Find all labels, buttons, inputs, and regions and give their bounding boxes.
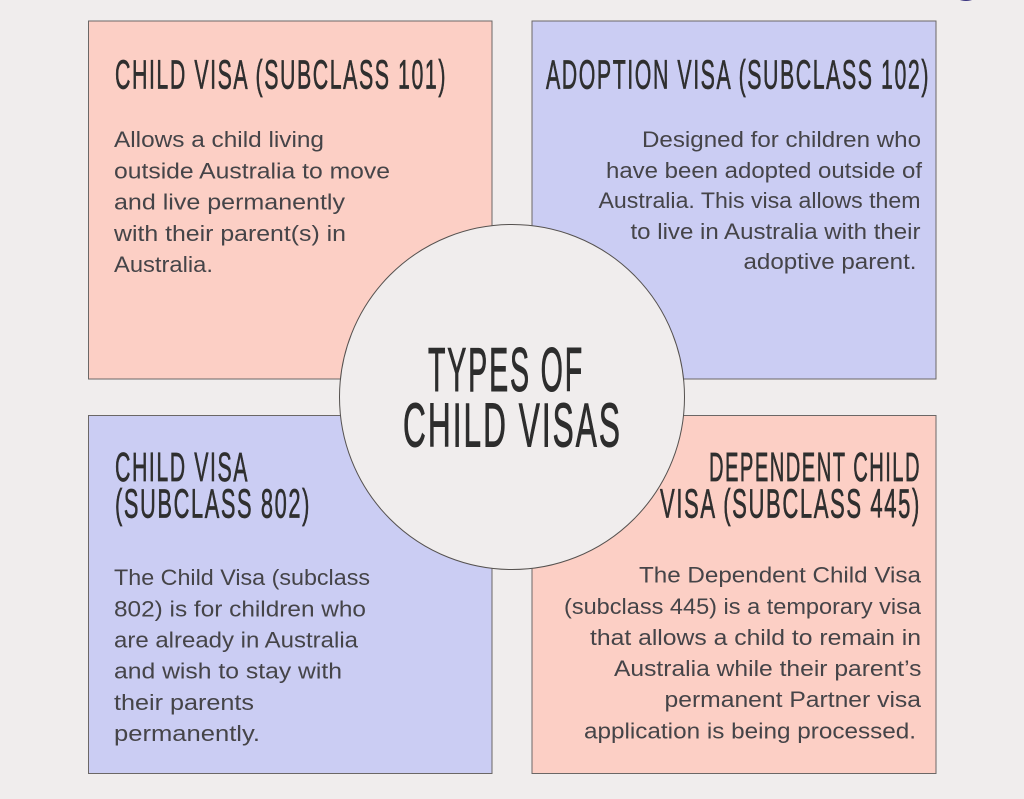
body text: and wish to stay with [114,658,342,684]
body text: outside Australia to move [114,158,390,184]
body text: application is being processed. [584,718,916,744]
top edge dark circle fragment [955,0,977,1]
panel: Adoption Visa subclass 102 [532,21,936,379]
body text: their parents [114,690,254,715]
heading [115,444,311,526]
body text: The Dependent Child Visa [639,562,922,588]
body text: that allows a child to remain in [590,625,921,650]
heading [660,444,921,526]
body text: Australia while their parent’s [614,656,922,681]
panel: Child Visa subclass 802 [88,416,492,774]
center circle with title [340,224,684,570]
body text: (subclass 445) is a temporary visa [564,594,921,619]
body text: permanently. [114,721,260,746]
body text: Designed for children who [642,127,921,152]
body text: Australia. This visa allows them [598,188,920,213]
title [403,336,622,460]
panel background [88,21,492,379]
body text: have been adopted outside of [606,158,923,183]
heading: CHILD VISA (SUBCLASS 101) [115,52,447,98]
circle [340,224,684,570]
body text: adoptive parent. [744,249,916,274]
body text: permanent Partner visa [664,687,922,712]
body text: 802) is for children who [114,596,366,622]
heading: (SUBCLASS 802) [115,480,311,526]
panel background [88,416,492,774]
body text: and live permanently [114,190,346,214]
body text: with their parent(s) in [113,221,346,246]
panel: Dependent Child Visa subclass 445 [532,416,936,774]
body text [114,565,370,746]
title: TYPES OF [428,336,584,405]
panel background [532,416,936,774]
panel background [532,21,936,379]
body text [598,127,923,274]
title: CHILD VISAS [403,392,622,460]
body text: Australia. [114,252,213,277]
body text [113,127,390,277]
body text: Allows a child living [114,127,324,152]
body text: to live in Australia with their [630,219,921,244]
body text [564,562,922,744]
panel: Child Visa subclass 101 [88,21,492,379]
body text: The Child Visa (subclass [114,565,370,590]
heading: CHILD VISA [115,444,249,490]
body text: are already in Australia [114,628,359,652]
